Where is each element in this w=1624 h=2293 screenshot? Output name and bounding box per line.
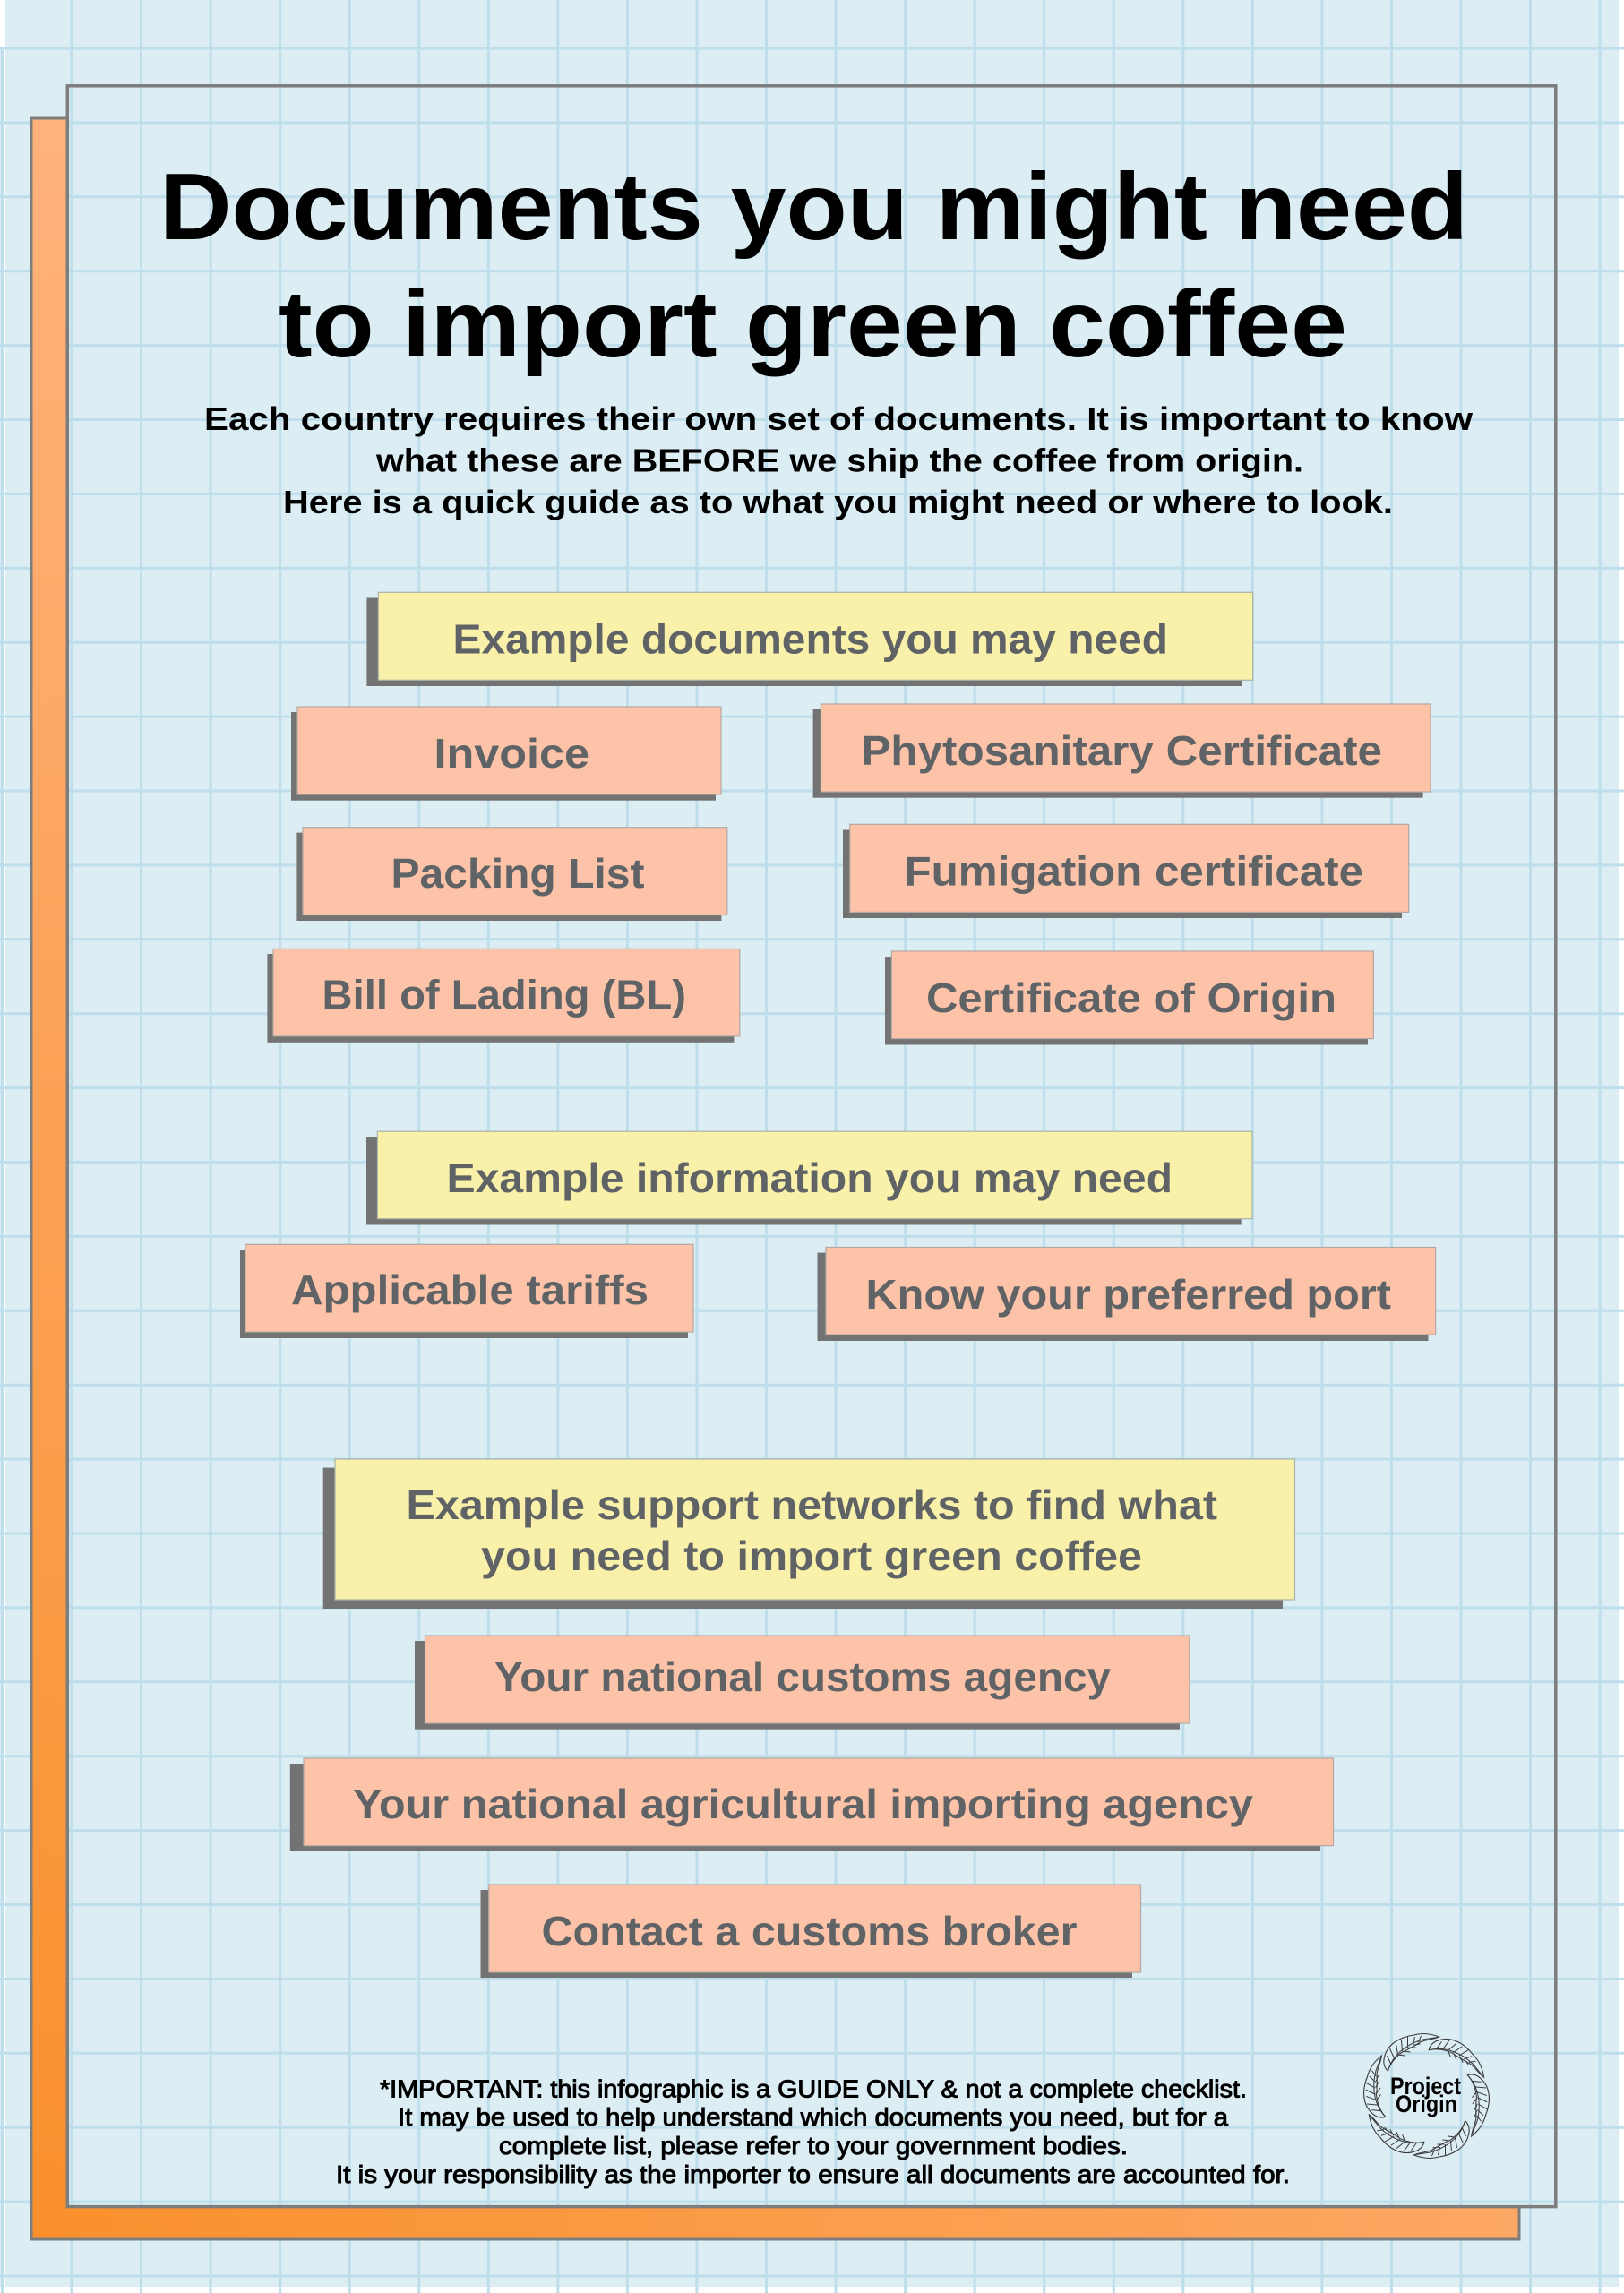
item: national agricultural importing agency: Your national agricultural importing agency	[353, 1781, 1253, 1827]
item: applicable tariffs: Applicable tariffs	[291, 1267, 649, 1313]
disclaimer text	[336, 2075, 1290, 2188]
heading: example support networks: you need to import green coffee	[481, 1533, 1142, 1579]
heading: example documents	[366, 592, 1253, 686]
item: certificate of origin: Certificate of Origin	[926, 975, 1336, 1021]
title	[159, 154, 1468, 377]
item: phytosanitary certificate	[813, 704, 1431, 798]
logo: Project Origin leaf wreath: Project	[1390, 2073, 1461, 2100]
heading: example support networks	[323, 1459, 1295, 1609]
disclaimer text: It is your responsibility as the importer to ensure all documents are accounted for.	[336, 2160, 1290, 2188]
logo: Project Origin leaf wreath: Origin	[1396, 2091, 1457, 2117]
item: know your preferred port: Know your preferred port	[865, 1271, 1391, 1318]
item: national agricultural importing agency	[290, 1758, 1333, 1851]
disclaimer text: complete list, please refer to your government bodies.	[499, 2132, 1128, 2160]
title: Documents you might need	[159, 154, 1468, 260]
item: fumigation certificate	[843, 824, 1409, 918]
item: packing list: Packing List	[391, 850, 645, 897]
item: contact a customs broker	[480, 1885, 1141, 1978]
intro text: Here is a quick guide as to what you might need or where to look.	[283, 484, 1393, 520]
item: contact a customs broker: Contact a customs broker	[541, 1908, 1078, 1954]
intro text: what these are BEFORE we ship the coffee from origin.	[375, 442, 1303, 479]
item: know your preferred port	[817, 1247, 1436, 1341]
heading: example support networks: Example support networks to find what	[407, 1481, 1217, 1528]
item: invoice	[291, 707, 721, 801]
heading: example information: Example information you may need	[446, 1155, 1173, 1201]
item: certificate of origin	[885, 951, 1373, 1044]
item: applicable tariffs	[240, 1244, 693, 1338]
item: fumigation certificate: Fumigation certificate	[905, 847, 1363, 894]
item: bill of lading	[267, 949, 740, 1043]
intro text: Each country requires their own set of documents. It is important to know	[204, 400, 1474, 437]
disclaimer text: It may be used to help understand which documents you need, but for a	[398, 2103, 1228, 2131]
disclaimer text: *IMPORTANT: this infographic is a GUIDE ONLY & not a complete checklist.	[380, 2075, 1247, 2103]
logo: Project Origin leaf wreath	[1352, 2028, 1501, 2164]
heading: example information	[366, 1131, 1252, 1225]
title: to import green coffee	[279, 271, 1347, 377]
item: phytosanitary certificate: Phytosanitary Certificate	[862, 727, 1382, 774]
heading: example documents: Example documents you may need	[453, 616, 1168, 663]
item: invoice: Invoice	[434, 730, 589, 777]
item: national customs agency: Your national customs agency	[494, 1653, 1111, 1700]
item: national customs agency	[415, 1636, 1190, 1730]
item: packing list	[296, 828, 727, 921]
item: bill of lading: Bill of Lading (BL)	[322, 971, 686, 1018]
intro text	[204, 400, 1474, 520]
